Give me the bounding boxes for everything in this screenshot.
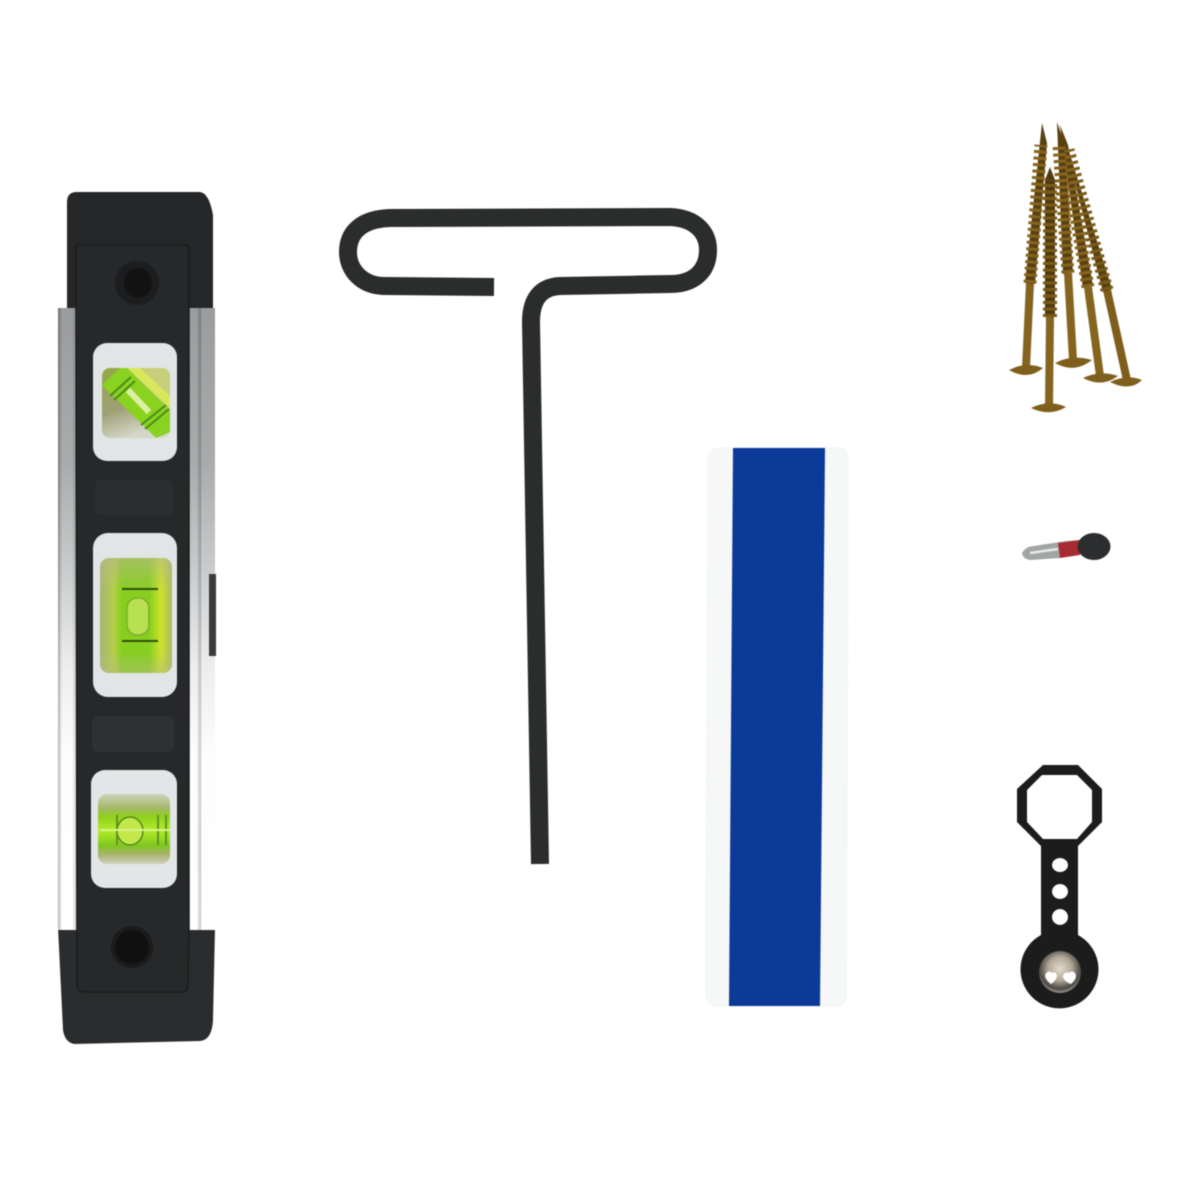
middle vial, vertical <box>93 533 177 697</box>
top screw <box>115 261 159 305</box>
level bottom end cap <box>58 927 215 1044</box>
level top end cap <box>67 192 213 310</box>
double-sided tape strip <box>705 447 849 1007</box>
screw 5 <box>1060 125 1142 387</box>
screw 3 <box>1055 122 1092 368</box>
bottom screw <box>111 926 153 968</box>
blue tape <box>729 448 825 1006</box>
screw 1 <box>1009 123 1047 375</box>
torpedo level <box>58 192 216 1044</box>
screw 2, front <box>1031 167 1066 412</box>
label recess lower <box>92 716 174 752</box>
tape backing <box>705 447 849 1007</box>
bottom vial, horizontal <box>91 770 177 888</box>
driver bit <box>1022 533 1110 560</box>
screws <box>1009 122 1142 412</box>
multi wrench <box>1017 765 1102 1008</box>
tool kit illustration <box>57 122 1142 1045</box>
level centre body <box>76 245 189 992</box>
T-handle hex key <box>348 217 708 864</box>
right aluminium rail <box>187 308 216 930</box>
screw 4 <box>1060 125 1118 383</box>
wrench body <box>1017 765 1102 1008</box>
top vial, 45 degrees <box>93 343 177 461</box>
chrome ball <box>1039 951 1081 993</box>
label recess upper <box>95 480 173 515</box>
left aluminium rail <box>58 308 78 930</box>
